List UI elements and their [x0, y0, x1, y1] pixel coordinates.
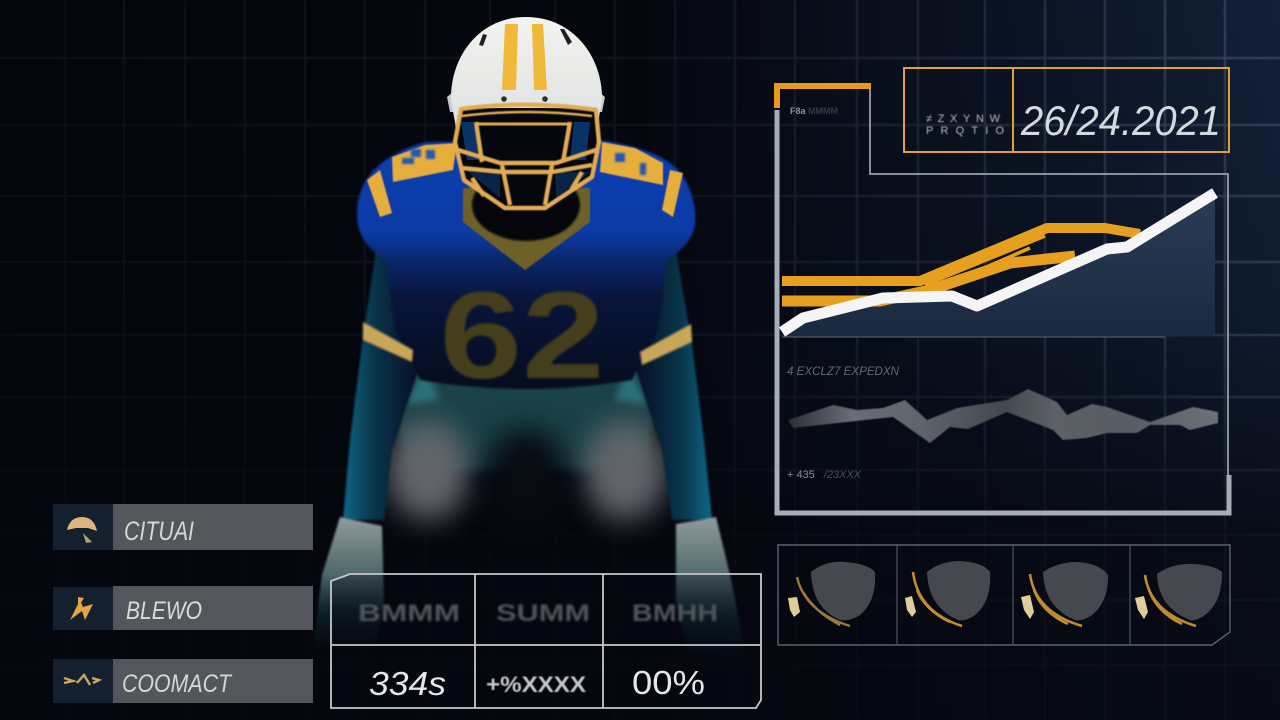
chart panel [777, 86, 1229, 514]
player legs [386, 360, 667, 528]
table header: column labels: BMHH [632, 600, 718, 627]
thumbnail 3 [1021, 562, 1108, 626]
football player [312, 17, 748, 665]
neck shadow [472, 169, 580, 241]
collar [463, 188, 590, 270]
stats table [331, 574, 761, 708]
icon: squiggle [64, 675, 99, 685]
helmet visor opening [455, 108, 600, 208]
icon: helmet [67, 517, 97, 543]
icon: bolt [70, 597, 93, 620]
area wave chart [788, 389, 1218, 443]
stat row: 1: CITUAI [124, 516, 194, 546]
thumbnail 1 [788, 562, 875, 626]
stat row: 1 [53, 504, 313, 550]
line chart [782, 192, 1215, 337]
table header: column labels [358, 600, 718, 627]
table header: column labels: SUMM [496, 600, 590, 627]
table header: column labels: BMMM [358, 600, 460, 627]
stat row: 3 [53, 659, 313, 703]
arm bands [363, 322, 692, 365]
jersey number: 62 [440, 267, 604, 405]
table value: 00%: 00% [632, 664, 705, 701]
white line [782, 193, 1215, 332]
helmet shell [451, 17, 602, 128]
helmet stripes [502, 24, 547, 90]
helmet vents [479, 29, 572, 46]
thumbnail 2 [905, 561, 990, 626]
player jersey [357, 140, 695, 389]
helmet side clips [447, 92, 605, 112]
panel frame [777, 86, 1229, 514]
helmet facemask [455, 105, 599, 208]
date value: 26/24.2021 [1020, 97, 1221, 144]
table value: middle: +%XXXX [486, 672, 586, 697]
chart label middle: 4 EXCLZ7 EXPEDXN [787, 364, 899, 378]
date label [926, 113, 1004, 137]
stat list [53, 504, 313, 703]
helmet [447, 17, 605, 208]
stat row: 3: COOMACT [122, 670, 232, 698]
orange lines [782, 228, 1140, 301]
helmet thumbnails [778, 545, 1230, 645]
player left glove [312, 517, 384, 655]
shoulder numbers [367, 142, 683, 217]
player left arm [343, 250, 425, 520]
player right arm [630, 250, 712, 520]
date box [904, 68, 1229, 152]
chart label bottom: + 435 /23XXX [787, 469, 862, 481]
stat row: 2: BLEWO [126, 597, 202, 625]
thumbnail 4 [1135, 564, 1222, 626]
date label: PRQTIO [926, 125, 1004, 137]
table value: 334s: 334s [369, 665, 446, 702]
chart label top: F8a MMMM [790, 106, 838, 116]
player right glove [676, 517, 748, 665]
date label: ≠ZXYNW [926, 113, 1001, 125]
stat row: 2 [53, 586, 313, 630]
